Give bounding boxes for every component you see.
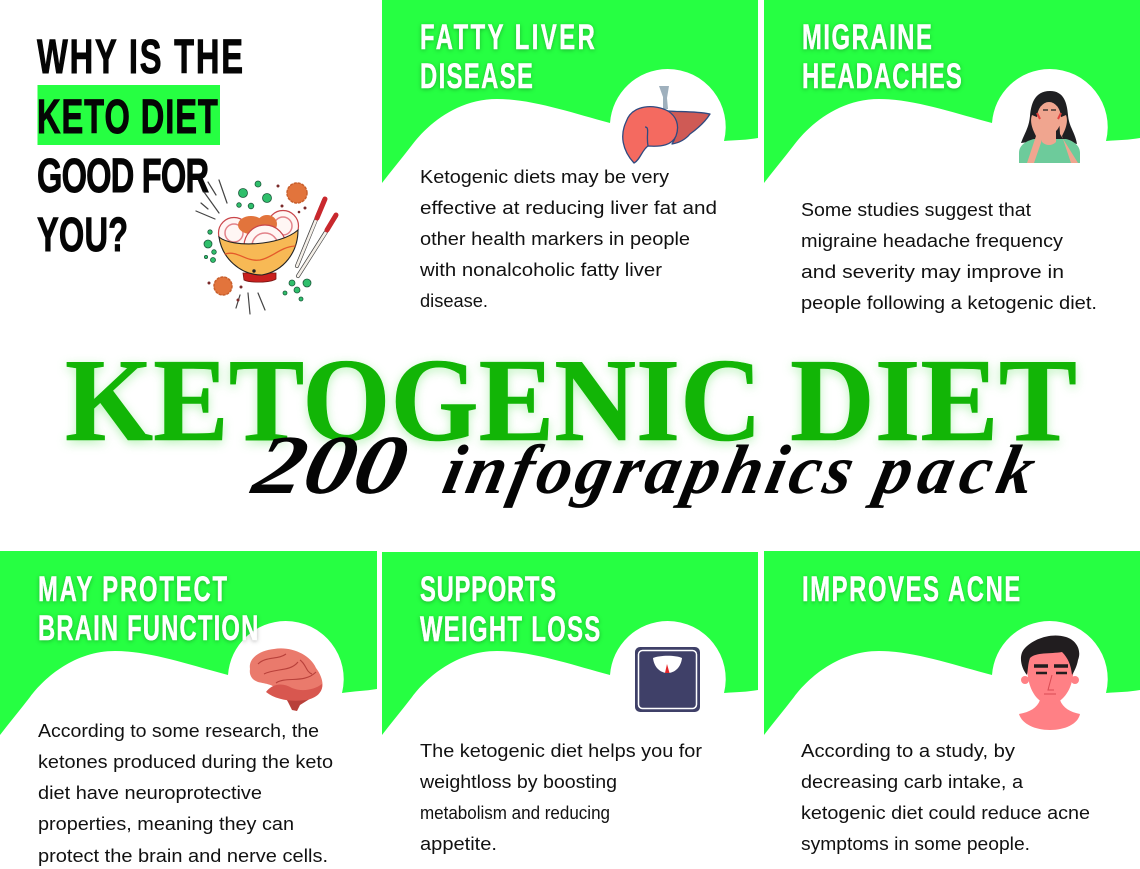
- panel: improves acne: [764, 551, 1140, 854]
- body text: protect the brain and nerve cells.: [38, 846, 328, 866]
- body text: disease.: [420, 291, 488, 311]
- subtitle: 200 infographics pack: 200: [244, 419, 416, 512]
- icon: weighing scale: [635, 647, 700, 712]
- body text: ketones produced during the keto: [38, 752, 333, 772]
- body text: Ketogenic diets may be very: [420, 167, 669, 187]
- body text: and severity may improve in: [801, 262, 1064, 282]
- heading: why is the keto diet good for you: [37, 30, 243, 262]
- body text: with nonalcoholic fatty liver: [419, 260, 662, 280]
- subtitle: 200 infographics pack: pack: [864, 432, 1042, 509]
- body text: other health markers in people: [420, 229, 690, 249]
- panel: fatty liver disease: [382, 0, 758, 311]
- icon: woman with headache: [1019, 91, 1080, 163]
- heading: why is the keto diet good for you: YOU?: [37, 208, 128, 262]
- body text: [38, 721, 333, 866]
- body text: decreasing carb intake, a: [801, 772, 1024, 792]
- title: ketogenic diet: DIET: [790, 334, 1077, 466]
- title: ketogenic diet: KETOGENIC: [65, 334, 762, 466]
- heading: BRAIN FUNCTION: [38, 610, 258, 648]
- body text: symptoms in some people.: [801, 834, 1030, 854]
- body text: According to some research, the: [38, 721, 319, 741]
- icon: liver: [623, 86, 710, 163]
- body text: [801, 741, 1090, 854]
- panel: migraine headaches: [764, 0, 1140, 313]
- heading: [420, 571, 600, 649]
- heading: SUPPORTS: [420, 571, 556, 609]
- icon: brain: [250, 648, 323, 711]
- body text: people following a ketogenic diet.: [801, 293, 1097, 313]
- heading: HEADACHES: [802, 58, 962, 96]
- body text: effective at reducing liver fat and: [420, 198, 717, 218]
- heading: FATTY LIVER: [420, 19, 595, 57]
- body text: [419, 167, 717, 311]
- heading: MIGRAINE: [802, 19, 932, 57]
- body text: properties, meaning they can: [38, 814, 294, 834]
- subtitle: 200 infographics pack: [244, 419, 1042, 512]
- subtitle: 200 infographics pack: infographics: [437, 432, 861, 509]
- heading: why is the keto diet good for you: GOOD FOR: [37, 149, 209, 203]
- panel: why is the keto diet good for you: [37, 30, 336, 314]
- body text: Some studies suggest that: [801, 200, 1031, 220]
- heading: [38, 571, 258, 648]
- body text: ketogenic diet could reduce acne: [801, 803, 1090, 823]
- body text: [419, 741, 702, 854]
- body text: [801, 200, 1097, 313]
- body text: metabolism and reducing: [420, 803, 610, 823]
- panel: may protect brain function: [0, 551, 377, 866]
- icon: man with acne: [1019, 635, 1080, 730]
- heading: IMPROVES ACNE: [802, 571, 1020, 609]
- green wave header: [764, 551, 1140, 735]
- green wave header: [382, 552, 758, 735]
- panel: supports weight loss: [382, 552, 758, 854]
- heading: WEIGHT LOSS: [420, 611, 600, 649]
- body text: The ketogenic diet helps you for: [420, 741, 702, 761]
- body text: appetite.: [420, 834, 497, 854]
- body text: diet have neuroprotective: [38, 783, 262, 803]
- green wave header: [0, 551, 377, 735]
- green wave header: [382, 0, 758, 183]
- heading: DISEASE: [420, 58, 533, 96]
- body text: migraine headache frequency: [801, 231, 1063, 251]
- heading: MAY PROTECT: [38, 571, 227, 609]
- heading: why is the keto diet good for you: WHY IS THE: [37, 30, 243, 84]
- heading: [802, 19, 962, 96]
- body text: weightloss by boosting: [419, 772, 617, 792]
- body text: According to a study, by: [801, 741, 1015, 761]
- heading: [420, 19, 595, 96]
- heading: why is the keto diet good for you: KETO DIET: [37, 90, 218, 144]
- icon: noodle bowl with chopsticks: [196, 180, 336, 314]
- green wave header: [764, 0, 1140, 183]
